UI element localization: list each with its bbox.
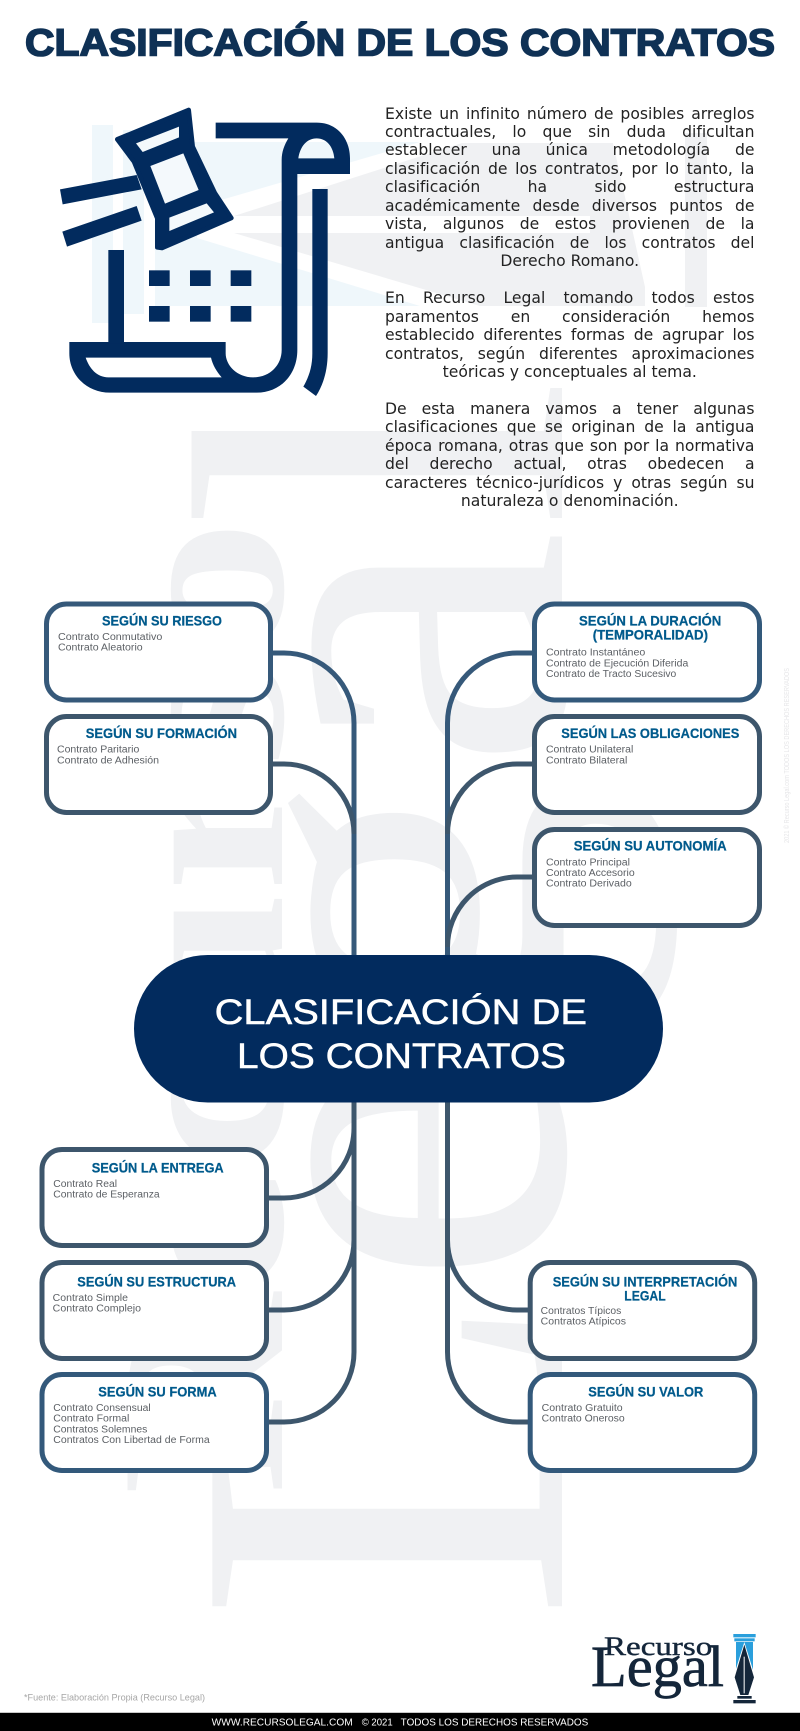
connector lines from central pill to boxes xyxy=(267,653,534,1422)
intro text block: clasificación ha sido estructura xyxy=(385,178,754,196)
panel: según las obligaciones: Contrato Unilateral xyxy=(546,745,633,756)
intro text block xyxy=(385,104,754,510)
intro text block: paramentos en consideración hemos xyxy=(385,308,754,326)
title: CLASIFICACIÓN DE LOS CONTRATOS xyxy=(25,20,775,64)
logo: Recurso Legal: Recurso xyxy=(604,1632,712,1661)
panel: según su interpretación legal: SEGÚN SU INTERPRETACIÓN xyxy=(553,1275,737,1290)
background watermark: rotated pen emblem and logo wordmark: Recurso xyxy=(73,520,334,1495)
panel: según su valor xyxy=(530,1374,755,1470)
panel: según las obligaciones xyxy=(534,716,760,812)
panel: según su formación xyxy=(46,716,270,812)
panel: según las obligaciones: SEGÚN LAS OBLIGACIONES xyxy=(561,726,739,741)
panel: según la entrega: Contrato Real xyxy=(53,1179,117,1190)
background watermark: rotated pen emblem and logo wordmark: Legal xyxy=(86,377,679,1622)
panel: según su riesgo xyxy=(46,604,270,700)
panel: según su autonomía: Contrato Accesorio xyxy=(546,868,635,879)
intro text block: clasificación de los contratos, por lo tanto, la xyxy=(385,160,754,178)
intro text block: En Recurso Legal tomando todos estos xyxy=(385,289,754,307)
logo: Recurso Legal: Legal xyxy=(591,1634,724,1699)
intro text block: establecido diferentes formas de agrupar los xyxy=(385,326,754,344)
intro text block: teóricas y conceptuales al tema. xyxy=(443,363,697,381)
panel: según su forma: Contrato Formal xyxy=(53,1414,129,1425)
intro text block: académicamente desde diversos puntos de xyxy=(385,197,754,215)
panel: según la duración: Contrato Instantáneo xyxy=(546,648,646,659)
panel: según la duración: (TEMPORALIDAD) xyxy=(593,627,708,642)
footer bar: © 2021 xyxy=(362,1717,393,1728)
footer bar xyxy=(0,1712,800,1731)
panel: según su interpretación legal xyxy=(530,1262,755,1358)
panel: según su interpretación legal: Contratos Típicos xyxy=(541,1306,621,1317)
icon: contract scroll with gavel xyxy=(60,110,350,396)
panel: según la duración: Contrato de Tracto Sucesivo xyxy=(546,669,677,680)
panel: según su interpretación legal: Contratos Atípicos xyxy=(541,1317,626,1328)
panel: según la entrega xyxy=(42,1150,266,1246)
intro text block: establecer una única metodología de xyxy=(385,141,754,159)
panel: según la duración xyxy=(534,604,760,700)
panel: según la entrega: Contrato de Esperanza xyxy=(53,1190,160,1201)
panel: según la entrega: SEGÚN LA ENTREGA xyxy=(92,1161,224,1176)
intro text block: naturaleza o denominación. xyxy=(461,492,679,510)
panel: según su forma: SEGÚN SU FORMA xyxy=(98,1385,217,1400)
source note: *Fuente: Elaboración Propia (Recurso Legal) xyxy=(24,1693,205,1704)
panel: según su forma: Contratos Solemnes xyxy=(53,1424,147,1435)
panel: según su forma: Contrato Consensual xyxy=(53,1403,151,1414)
panel: según su formación: Contrato Paritario xyxy=(57,745,140,756)
panel: según la duración: Contrato de Ejecución Diferida xyxy=(546,658,689,669)
panel: según su formación: Contrato de Adhesión xyxy=(57,755,159,766)
panel: según su autonomía: Contrato Principal xyxy=(546,857,630,868)
intro text block: clasificaciones que se originan de la antigua xyxy=(385,418,754,436)
panel: según su estructura: SEGÚN SU ESTRUCTURA xyxy=(77,1275,236,1290)
panel: según su valor: SEGÚN SU VALOR xyxy=(588,1385,703,1400)
intro text block: De esta manera vamos a tener algunas xyxy=(385,400,754,418)
panel: según su riesgo: Contrato Aleatorio xyxy=(58,643,143,654)
intro text block: del derecho actual, otras obedecen a xyxy=(385,455,754,473)
panel: según su valor: Contrato Gratuito xyxy=(542,1403,623,1414)
central pill heading: CLASIFICACIÓN DE xyxy=(215,993,587,1032)
panel: según su riesgo: SEGÚN SU RIESGO xyxy=(102,614,222,629)
intro text block: Existe un infinito número de posibles arreglos xyxy=(385,104,754,122)
panel: según su forma xyxy=(42,1374,266,1470)
panel: según su autonomía: SEGÚN SU AUTONOMÍA xyxy=(574,839,727,854)
central pill heading: LOS CONTRATOS xyxy=(237,1037,566,1076)
panel: según su formación: SEGÚN SU FORMACIÓN xyxy=(86,726,237,741)
panel: según su autonomía: Contrato Derivado xyxy=(546,879,632,890)
intro text block: Derecho Romano. xyxy=(500,252,639,270)
central pill heading xyxy=(134,955,663,1102)
panel: según su estructura: Contrato Simple xyxy=(53,1293,129,1304)
intro text block: vista, algunos de estos provienen de la xyxy=(385,215,754,233)
intro text block: contratos, según diferentes aproximaciones xyxy=(385,345,754,363)
panel: según su estructura xyxy=(42,1262,266,1358)
panel: según la duración: SEGÚN LA DURACIÓN xyxy=(579,614,721,629)
panel: según su interpretación legal: LEGAL xyxy=(624,1288,666,1303)
panel: según su autonomía xyxy=(534,830,760,926)
panel: según su estructura: Contrato Complejo xyxy=(53,1304,142,1315)
footer bar: TODOS LOS DERECHOS RESERVADOS xyxy=(401,1717,589,1728)
intro text block: antigua clasificación de los contratos del xyxy=(385,234,754,252)
intro text block: contractuales, lo que sin duda dificultan xyxy=(385,123,754,141)
intro text block: caracteres técnico-jurídicos y otras según su xyxy=(385,474,754,492)
panel: según su riesgo: Contrato Conmutativo xyxy=(58,632,163,643)
panel: según las obligaciones: Contrato Bilateral xyxy=(546,755,627,766)
footer bar: WWW.RECURSOLEGAL.COM xyxy=(212,1717,353,1728)
panel: según su forma: Contratos Con Libertad de Forma xyxy=(53,1435,210,1446)
panel: según su valor: Contrato Oneroso xyxy=(542,1414,625,1425)
intro text block: época romana, otras que son por la normativa xyxy=(385,437,754,455)
vertical copyright note: 2021 © Recurso Legal.com TODOS LOS DERECHOS RESERVADOS xyxy=(783,668,791,843)
